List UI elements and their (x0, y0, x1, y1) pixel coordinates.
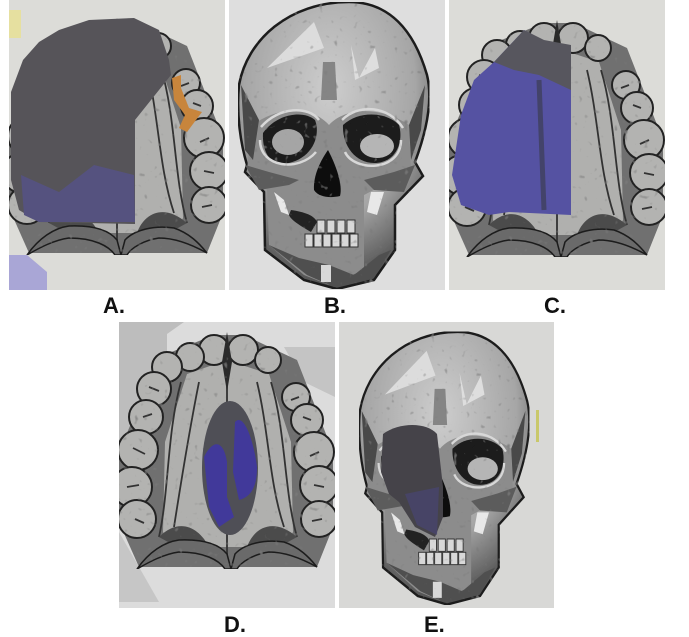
label D: D. (224, 612, 246, 637)
panel D: palate with blue ellipse (112, 322, 338, 608)
label C: C. (544, 293, 566, 318)
orange highlight A (172, 75, 202, 132)
label E: E. (424, 612, 445, 637)
shaded region A (11, 18, 171, 224)
lilac patch A (9, 255, 47, 290)
panel A: palate with grey and blue shaded region (2, 0, 228, 290)
palate drawing A (2, 18, 228, 255)
panel C: palate with blue region (442, 0, 668, 290)
dark region C (494, 30, 571, 90)
dark shaded region E (381, 425, 443, 537)
palate drawing C (442, 20, 668, 257)
panel E: skull with shaded region (339, 322, 554, 608)
label B: B. (324, 293, 346, 318)
blue area E (405, 487, 439, 535)
skull drawing E (359, 332, 529, 605)
blue region C (452, 30, 571, 215)
blue ellipse D (202, 401, 258, 535)
panel B: skull front view (229, 0, 445, 290)
palate drawing D (112, 332, 338, 569)
label A: A. (103, 293, 125, 318)
blue region A (21, 165, 135, 222)
